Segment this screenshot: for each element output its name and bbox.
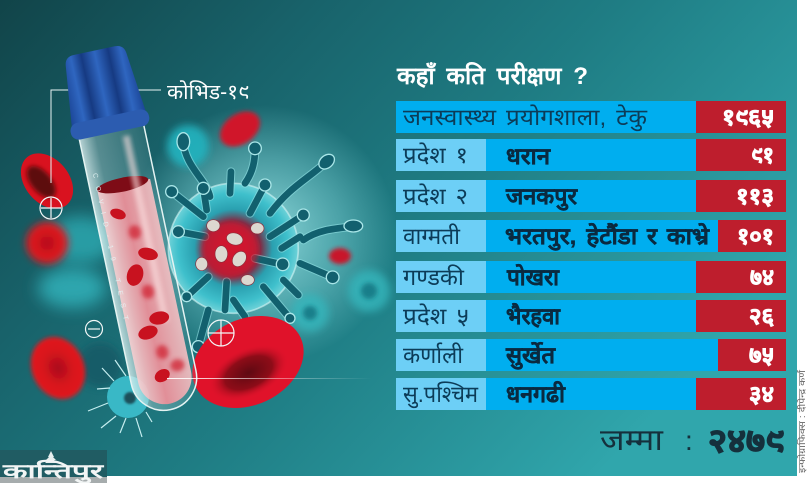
- row: karnali: सुर्खेत: [505, 341, 556, 370]
- plus symbol left: [40, 197, 62, 219]
- row: gandaki: ७४: [750, 264, 774, 290]
- row: karnali: ७५: [749, 342, 774, 368]
- total: २४७९: [708, 422, 784, 459]
- row: national lab: १९६५: [722, 104, 774, 130]
- credit: इन्फोग्राफिक्स : दीपेन्द्र कर्ण: [796, 369, 807, 473]
- row: province 2: प्रदेश २: [403, 183, 468, 209]
- row: province 5: २६: [749, 303, 774, 329]
- test tube: [55, 42, 210, 418]
- row: bagmati: १०१: [737, 223, 774, 249]
- tube liquid: [97, 179, 197, 409]
- sharp red blood cell: [10, 143, 84, 219]
- large red blood cell: [177, 299, 319, 425]
- row: province 1: धरान: [506, 143, 551, 169]
- minus symbol: [86, 320, 102, 338]
- row: sudurpaschim: सु.पश्चिम: [403, 381, 479, 409]
- label: covid-19: कोभिड-१९: [167, 80, 249, 104]
- leader line to label: [51, 90, 161, 183]
- row: sudurpaschim: धनगढी: [506, 380, 566, 407]
- row: province 1: ९१: [751, 142, 774, 168]
- row: province 5: प्रदेश ५: [403, 303, 469, 329]
- logo: [0, 450, 107, 483]
- row: sudurpaschim: ३४: [749, 381, 774, 407]
- virus spikes: [172, 142, 358, 347]
- spike tips: [166, 133, 363, 353]
- row: karnali: कर्णाली: [403, 342, 464, 368]
- large virus: [166, 133, 363, 353]
- row: province 1: प्रदेश १: [403, 142, 468, 168]
- total: [600, 422, 784, 459]
- row: province 2: ११३: [736, 183, 774, 209]
- row: bagmati: वाग्मती: [403, 223, 461, 249]
- table of testing labs: [396, 101, 786, 410]
- tube collar: [69, 108, 151, 141]
- row: national lab: जनस्वास्थ्य प्रयोगशाला, टेकु: [403, 104, 648, 132]
- tube print: COVID-19 TEST: [91, 173, 129, 321]
- row: gandaki: [396, 261, 786, 293]
- row: sudurpaschim: [396, 378, 786, 410]
- row: gandaki: पोखरा: [506, 263, 560, 290]
- total: :: [685, 425, 693, 456]
- row: gandaki: गण्डकी: [403, 264, 465, 290]
- blurred blood cells in tube: [128, 221, 186, 375]
- row: bagmati: [396, 220, 786, 252]
- small virus: [88, 360, 152, 437]
- virus core glow: [202, 222, 258, 278]
- blood cells in tube: [107, 199, 186, 388]
- virus body: [168, 183, 298, 313]
- blurred background cells: [21, 104, 397, 408]
- row: karnali: [396, 339, 786, 371]
- virus core receptors: [196, 220, 264, 285]
- light streak: [123, 135, 169, 322]
- logo: कान्तिपुर: [1, 459, 104, 483]
- row: national lab: [396, 101, 786, 133]
- row: province 2: [396, 180, 786, 212]
- row: province 5: [396, 300, 786, 332]
- row: province 2: जनकपुर: [505, 183, 579, 211]
- total: जम्मा: [600, 424, 664, 457]
- plus symbol right: [208, 320, 234, 346]
- row: province 1: [396, 139, 786, 171]
- title: कहाँ कति परीक्षण ?: [396, 62, 588, 90]
- horizontal leader line: [167, 378, 372, 379]
- liquid surface: [96, 172, 150, 197]
- tube glass: [79, 123, 203, 417]
- row: bagmati: भरतपुर, हेटौंडा र काभ्रे: [505, 222, 710, 251]
- row: province 5: भैरहवा: [506, 302, 561, 329]
- tube cap: [57, 43, 146, 129]
